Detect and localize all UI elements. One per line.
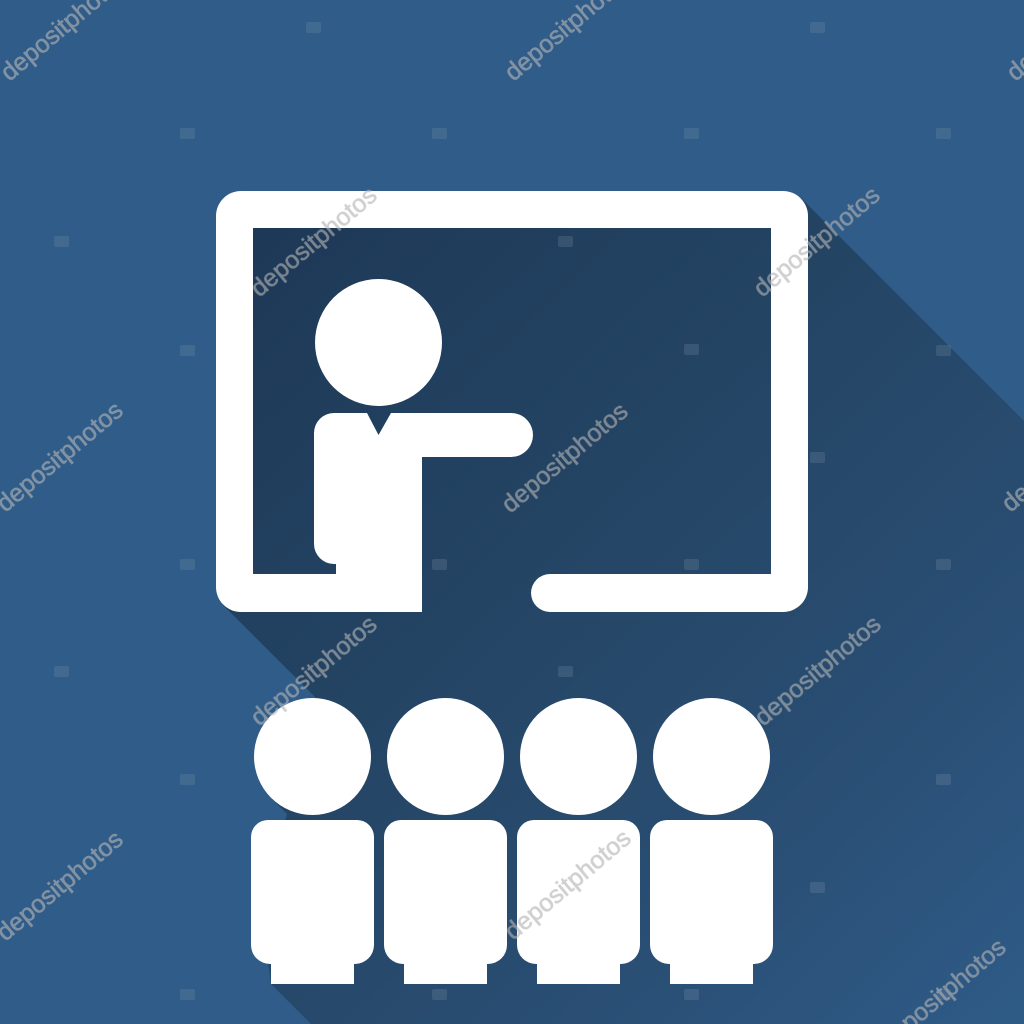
watermarks: depositphotos: [245, 610, 382, 732]
watermarks: depositphotos: [496, 397, 633, 519]
teacher body with pointing arm and tie notch: [314, 413, 533, 580]
board frame: [216, 191, 808, 612]
watermarks: depositphotos: [749, 610, 886, 732]
watermarks: depositphotos: [245, 181, 382, 303]
students row: [251, 698, 773, 984]
teacher head: [315, 279, 442, 406]
watermarks: depositphotos: [499, 824, 636, 946]
student 2: [384, 698, 507, 984]
long shadow: [223, 198, 1024, 1024]
student 1: [251, 698, 374, 984]
watermarks: depositphotos: [748, 181, 885, 303]
teacher figure: [314, 279, 533, 580]
student 4: [650, 698, 773, 984]
student 3: [517, 698, 640, 984]
